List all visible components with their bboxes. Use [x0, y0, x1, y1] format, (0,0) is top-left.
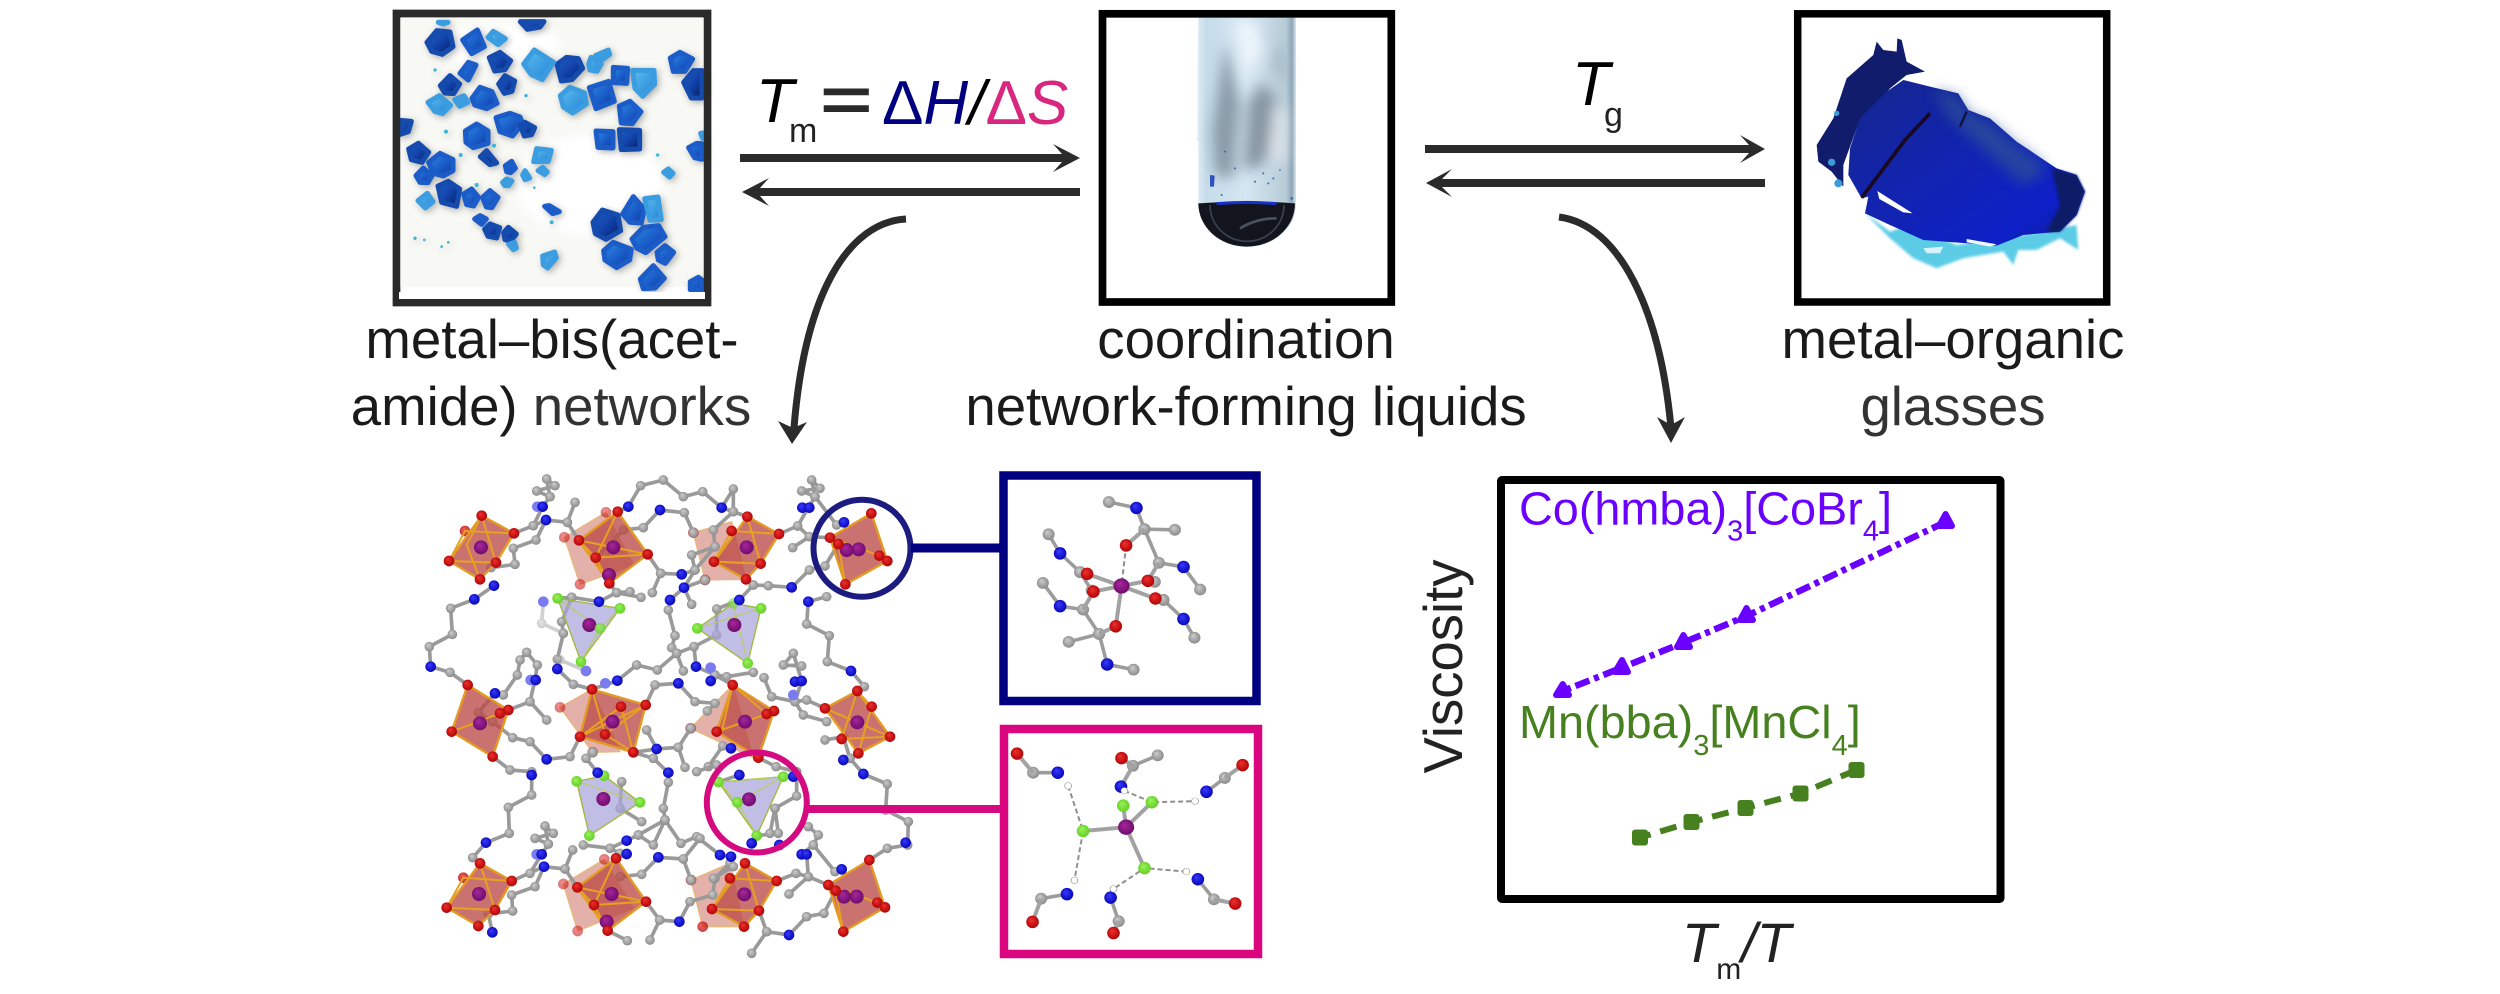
label: metal-organic glasses: metal–organic [1782, 309, 2124, 370]
label: metal-organic glasses: glasses [1860, 376, 2046, 437]
series label: purple: 4 [1863, 516, 1879, 548]
organic linker chains, upper half [429, 479, 864, 759]
series label: green: ] [1848, 696, 1861, 748]
crystals [400, 22, 703, 290]
photo panel: metal-bis(acetamide) network crystals [396, 14, 708, 302]
equation: Tm = dH/dS: ΔH/ΔS [882, 69, 1068, 138]
glass shard [1817, 38, 2085, 268]
organic linker chains, lower half [473, 728, 908, 953]
highlight circle and connector: cation [814, 500, 1000, 597]
equation: Tm = dH/dS: = [820, 66, 873, 135]
series label: green: 4 [1832, 730, 1848, 762]
arrows: glass transition equilibrium [1425, 135, 1765, 197]
label: metal-bis(acetamide) networks: amide) networks [351, 376, 751, 437]
back polyhedra [458, 507, 753, 936]
label: metal-bis(acetamide) networks [351, 309, 751, 437]
photo panel: metal-organic glass [1798, 14, 2107, 302]
series label: purple: Co(hmba) [1519, 482, 1727, 534]
photo panel: test tube with coordination liquid [1102, 14, 1391, 302]
test tube [1167, 18, 1317, 247]
equation: Tm = dH/dS: T [756, 67, 798, 136]
crystal structure network [425, 479, 911, 953]
series label: green: 3 [1693, 730, 1709, 762]
purple series: Co(hmba)3[CoBr4] [1556, 514, 1952, 695]
inset: cation coordination (navy) [1004, 476, 1256, 701]
label: Tg [1572, 50, 1623, 134]
x axis label: m [1716, 953, 1741, 986]
anion molecular model [1011, 747, 1249, 939]
label: metal-organic glasses [1782, 309, 2124, 437]
series label: purple: ] [1879, 482, 1892, 534]
x axis label: /T [1737, 911, 1795, 974]
nitrogen atoms [425, 501, 911, 940]
highlight circle and connector: anion [707, 752, 1000, 852]
anion tetrahedra [552, 593, 789, 841]
series label: purple: 3 [1727, 516, 1743, 548]
inset: anion hydrogen bonding (magenta) [1004, 729, 1258, 954]
series label: green: Mn(bba) [1519, 696, 1693, 748]
curved arrow to crystal structure [778, 219, 906, 444]
chart frame [1501, 480, 2000, 899]
label: coordination network-forming liquids: coordination [1097, 309, 1395, 370]
arrows: melting equilibrium [740, 144, 1080, 206]
series label: green: [MnCl [1709, 696, 1832, 748]
x axis label: T [1682, 911, 1716, 974]
label: coordination network-forming liquids: network-forming liquids [965, 376, 1527, 437]
equation: Tm = dH/dS: m [789, 112, 817, 150]
label: Tg: g [1604, 96, 1623, 134]
viscosity chart [1413, 480, 2000, 986]
equation: Tm = dH/dS [756, 66, 1068, 150]
cation molecular model [1043, 502, 1200, 671]
green series: Mn(bba)3[MnCl4] [1632, 762, 1864, 846]
label: metal-bis(acetamide) networks: metal–bis(acet- [365, 309, 739, 370]
curved arrow to viscosity chart [1559, 217, 1685, 443]
label: coordination network-forming liquids [965, 309, 1527, 437]
metal octahedra [441, 506, 895, 937]
cyan chips under shard [1865, 213, 2078, 268]
label: Tg: T [1572, 50, 1614, 119]
y axis label: Viscosity [1413, 559, 1474, 774]
series label: purple: [CoBr [1743, 482, 1863, 534]
